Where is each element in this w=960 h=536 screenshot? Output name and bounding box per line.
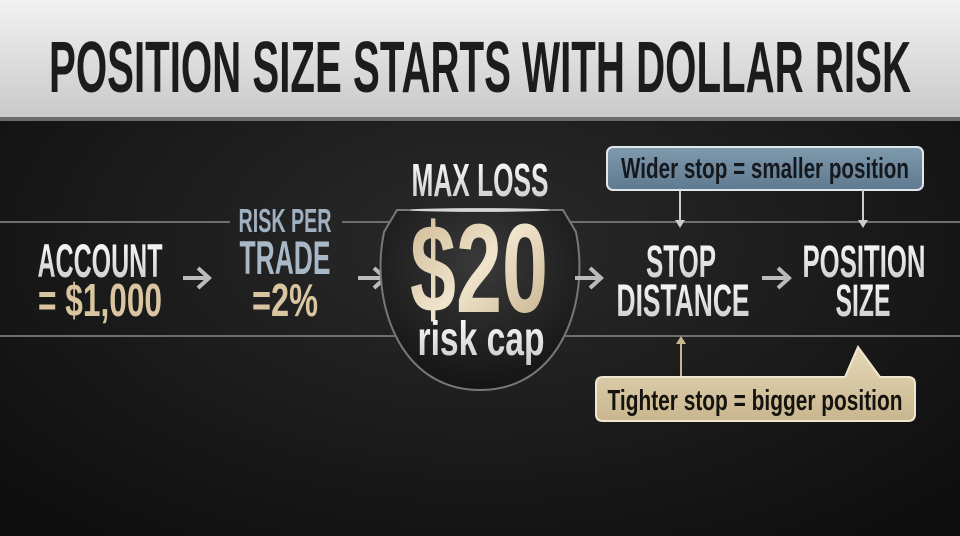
block: stop distance bbox=[616, 236, 750, 326]
block: stop distance: DISTANCE bbox=[616, 275, 750, 326]
circle: $20 risk cap bbox=[381, 198, 579, 390]
arrow 4 bbox=[762, 268, 789, 288]
callout: tighter stop bbox=[596, 336, 915, 421]
block: position size bbox=[802, 236, 926, 326]
block: account: ACCOUNT bbox=[38, 234, 163, 287]
header band bbox=[0, 0, 960, 121]
block: risk per trade: RISK PER bbox=[238, 202, 332, 239]
callout: wider stop bbox=[607, 147, 923, 228]
block: position size: SIZE bbox=[836, 275, 890, 326]
circle: $20 risk cap: $20 bbox=[410, 198, 548, 339]
block: risk per trade: =2% bbox=[252, 274, 318, 326]
max loss label: MAX LOSS bbox=[412, 154, 548, 206]
block: stop distance: STOP bbox=[646, 236, 716, 287]
block: account: = $1,000 bbox=[38, 274, 162, 326]
guide lines bbox=[0, 222, 960, 336]
block: risk per trade bbox=[238, 202, 332, 326]
arrow 1 bbox=[183, 268, 209, 288]
block: risk per trade: TRADE bbox=[240, 231, 330, 284]
arrow 3 bbox=[575, 268, 601, 288]
arrow 2 bbox=[358, 268, 385, 288]
block: account bbox=[38, 234, 163, 326]
circle: $20 risk cap: risk cap bbox=[418, 313, 544, 366]
